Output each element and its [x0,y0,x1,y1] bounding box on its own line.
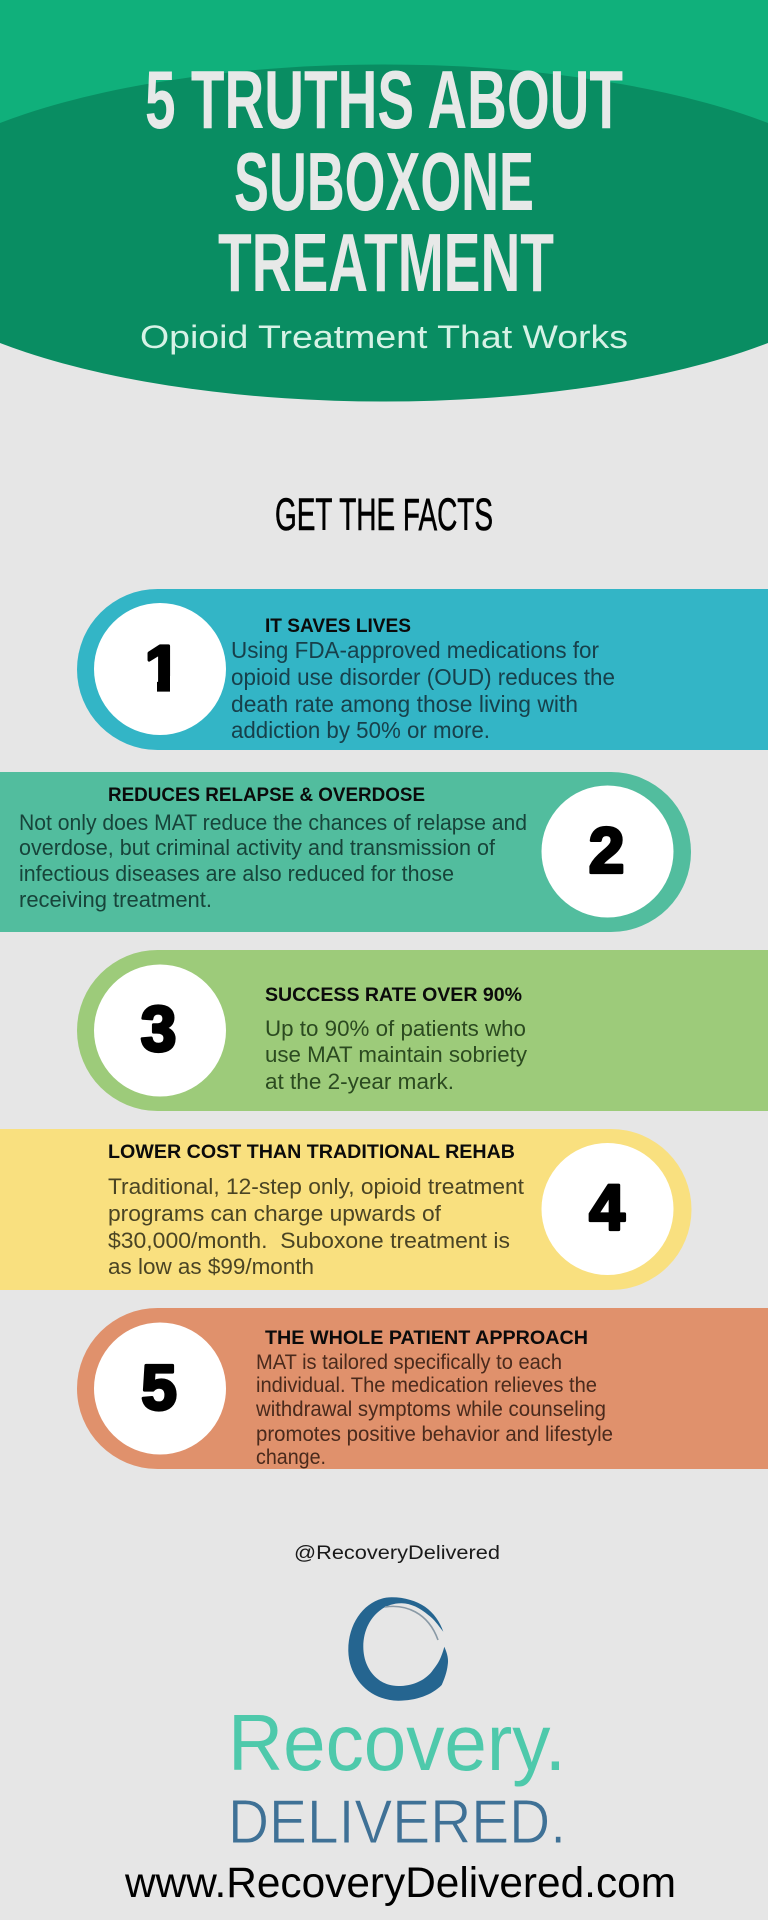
logo wordmark: delivered: DELIVERED. [228,1788,566,1857]
heading: success rate: SUCCESS RATE OVER 90% [265,984,522,1006]
panel: truth 4 [0,1129,692,1290]
social handle: @RecoveryDelivered [294,1542,500,1564]
text: truth 3 body [265,1016,527,1094]
text: truth 2 body: infectious diseases are also reduced for those [19,861,454,886]
text: truth 1 body [231,637,615,743]
logo [228,1597,566,1857]
panel: truth 1 [77,589,768,750]
title: SUBOXONE [234,135,534,228]
text: truth 4 body: Traditional, 12-step only, opioid treatment [108,1174,524,1199]
text: truth 5 body: MAT is tailored specifically to each [256,1351,562,1374]
panel: truth 2 [0,772,691,932]
heading: lower cost: LOWER COST THAN TRADITIONAL REHAB [108,1141,515,1163]
heading: get the facts: GET THE FACTS [275,489,493,540]
icon: number 3 [94,964,226,1096]
text: truth 1 body: addiction by 50% or more. [231,717,490,743]
text: truth 1 body: death rate among those living with [231,691,578,717]
text: truth 3 body: at the 2-year mark. [265,1069,454,1094]
text: truth 3 body: use MAT maintain sobriety [265,1042,527,1067]
icon: brush ring [348,1597,448,1701]
title [145,53,623,309]
text: truth 4 body: $30,000/month. Suboxone treatment is [108,1228,510,1253]
text: truth 2 body: overdose, but criminal activity and transmission of [19,835,496,860]
icon: number 5 [94,1322,226,1454]
text: truth 2 body: receiving treatment. [19,887,212,912]
text: truth 5 body: promotes positive behavior and lifestyle [256,1423,613,1446]
text: truth 4 body: programs can charge upwards of [108,1201,442,1226]
website url: www.RecoveryDelivered.com [124,1859,676,1907]
icon: number 4 [542,1143,674,1275]
header banner [0,0,768,402]
text: truth 5 body: individual. The medication relieves the [256,1374,597,1397]
icon: number 2: 2 [589,814,624,886]
heading: whole patient: THE WHOLE PATIENT APPROACH [265,1327,588,1349]
text: truth 2 body [19,810,527,912]
panel: truth 5 [77,1308,768,1469]
icon: number 5: 5 [141,1352,177,1424]
text: truth 1 body: Using FDA-approved medications for [231,637,599,663]
icon: number 4: 4 [589,1172,625,1244]
icon: number 1: 1 [145,632,180,704]
text: truth 4 body [108,1174,524,1279]
icon: number 2 [542,786,674,918]
logo wordmark: recovery: Recovery. [228,1698,566,1787]
text: truth 5 body: withdrawal symptoms while counseling [255,1398,606,1421]
text: truth 5 body [255,1351,613,1469]
title: TREATMENT [218,216,554,309]
subtitle: Opioid Treatment That Works [140,319,628,355]
text: truth 5 body: change. [256,1446,326,1469]
panel: truth 3 [77,950,768,1111]
text: truth 4 body: as low as $99/month [108,1254,314,1279]
text: truth 2 body: Not only does MAT reduce the chances of relapse and [19,810,527,835]
text: truth 1 body: opioid use disorder (OUD) reduces the [231,664,615,690]
icon: number 1 [94,603,226,735]
icon: number 3: 3 [141,993,176,1065]
heading: reduces relapse: REDUCES RELAPSE & OVERDOSE [108,784,425,806]
text: truth 3 body: Up to 90% of patients who [265,1016,526,1041]
heading: it saves lives: IT SAVES LIVES [265,615,411,637]
